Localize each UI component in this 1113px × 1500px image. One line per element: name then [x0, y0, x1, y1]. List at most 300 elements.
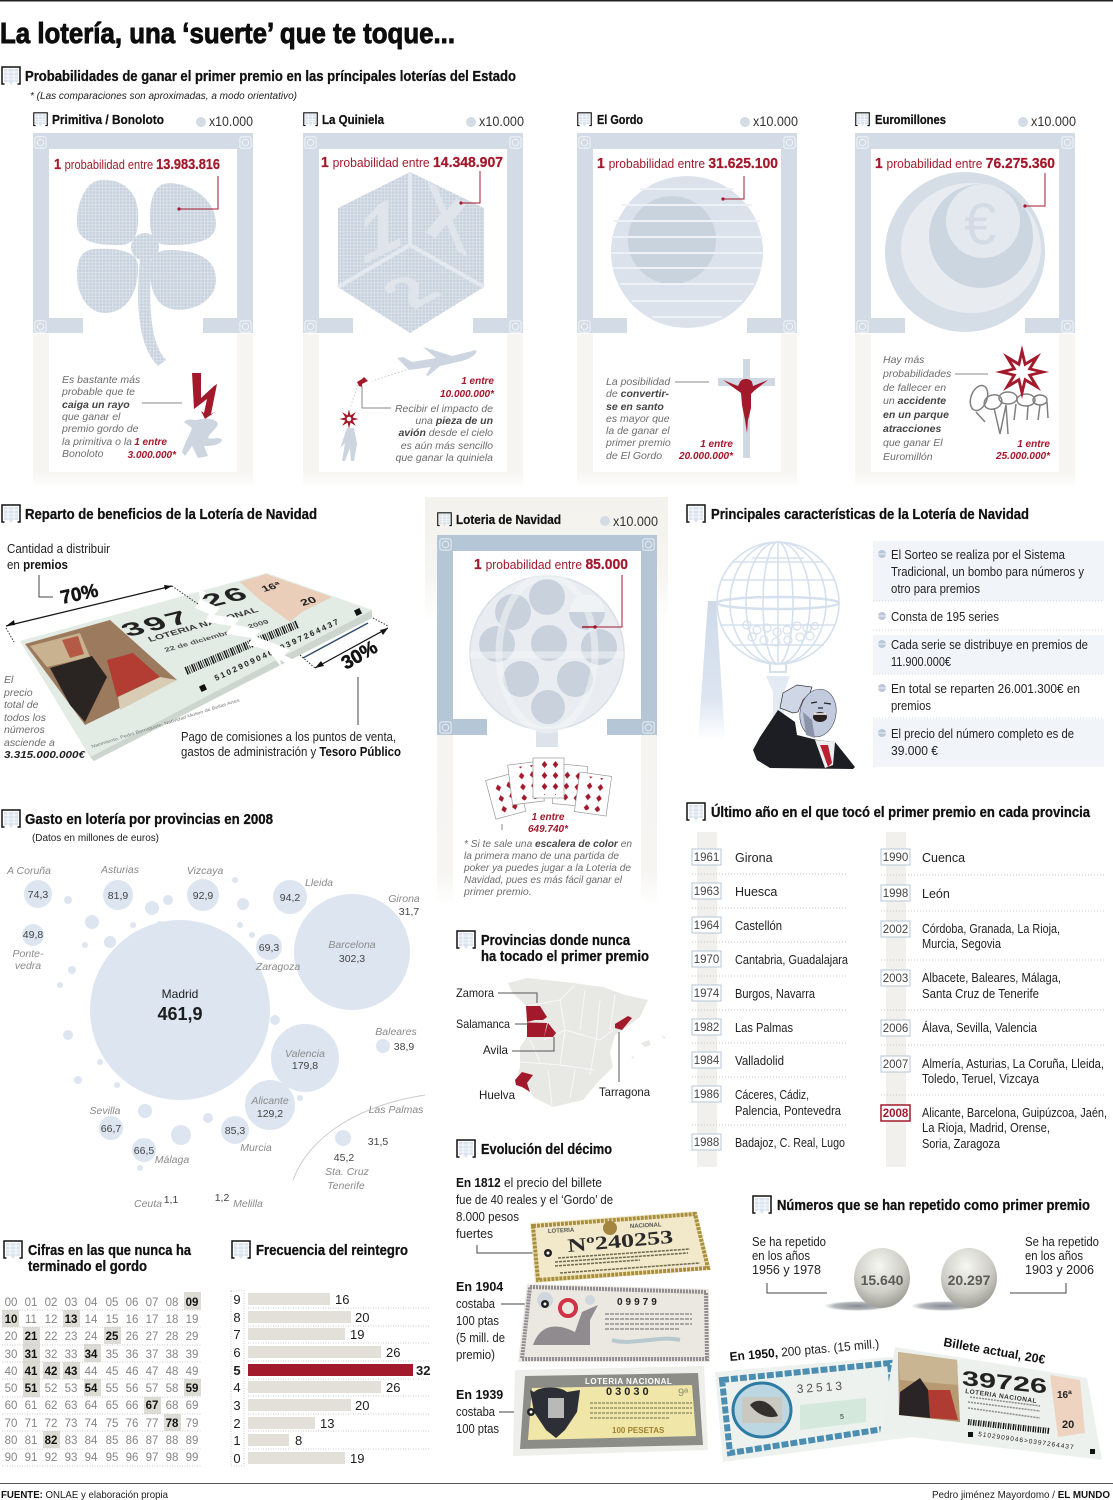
number grid: 51 [25, 1383, 38, 1395]
text: 1812 [456, 1176, 613, 1253]
text: commissions [181, 730, 401, 759]
panel: Euromillones: 25.000.000* [995, 451, 1051, 462]
icon: euro sphere [885, 172, 1045, 332]
list: characteristics: Consta de 195 series [891, 610, 999, 624]
left column of years: 1963 [694, 886, 719, 898]
probability label: 1 probabilidad entre 13.983.816 [54, 156, 220, 173]
number grid: 23 [65, 1331, 77, 1343]
number grid: 94 [85, 1452, 98, 1464]
number grid: 92 [45, 1452, 57, 1464]
number grid: 30 [5, 1349, 17, 1361]
bubble chart: 179,8 [292, 1060, 318, 1072]
icon: four-leaf clover [77, 180, 216, 366]
section: main characteristics [687, 505, 1104, 769]
number grid: 54 [85, 1383, 98, 1395]
bubble chart: Vizcaya [187, 865, 223, 877]
ticket: current: 16ª [1057, 1390, 1072, 1401]
bubble chart: Valencia [285, 1048, 325, 1060]
number grid: 06 [126, 1297, 138, 1309]
text: airplane comparison: Recibir el impacto de [395, 403, 493, 415]
text: 20.297 years: en los años [1025, 1249, 1083, 1263]
bubble chart: 66,5 [134, 1145, 154, 1157]
bubble chart: Asturias [100, 864, 140, 876]
number grid: 42 [45, 1366, 57, 1378]
text: lightning comparison: que ganar el [62, 411, 121, 423]
ball: 15.640 [824, 1248, 910, 1311]
number grid: 93 [65, 1452, 77, 1464]
icon: 1X2 cube: 2 [366, 267, 456, 317]
number grid: 98 [166, 1452, 178, 1464]
panel: Primitiva / Bonoloto: x10.000 [209, 114, 253, 129]
text: poker footnote: * Si te sale una escalera de color en [464, 838, 632, 850]
right column of years: 1990 [883, 852, 908, 864]
number grid: 66 [126, 1400, 138, 1412]
ticket: 1950: 32513 [796, 1379, 845, 1396]
number grid: 12 [45, 1314, 57, 1326]
number grid: 79 [186, 1418, 198, 1430]
heading: Provincias donde nunca [481, 932, 631, 949]
number grid: 11 [25, 1314, 37, 1326]
bubble chart: 45,2 [334, 1152, 354, 1164]
section: never-won endings: terminado el gordo [28, 1258, 147, 1275]
label: prizes [7, 542, 110, 597]
ticket: 1939 [513, 1366, 708, 1456]
bar chart: 4 [233, 1380, 241, 1395]
panel: La Quiniela: 10.000.000* [440, 389, 495, 400]
number grid: 62 [45, 1400, 57, 1412]
icon: person [340, 428, 357, 461]
bubble chart: 31,7 [399, 906, 419, 918]
bar chart [231, 1291, 430, 1466]
number grid: 70 [5, 1418, 17, 1430]
left column of years: Palencia, Pontevedra [735, 1104, 841, 1118]
number grid: 26 [126, 1331, 138, 1343]
text: saint comparison: La posibilidad [606, 376, 671, 388]
number grid: 74 [85, 1418, 98, 1430]
text: poker footnote [463, 838, 632, 898]
text: saint comparison: de convertir- [606, 388, 670, 400]
panel: El Gordo: x10.000 [753, 114, 798, 129]
text: 1904: 100 ptas [456, 1314, 499, 1328]
bubble chart: Melilla [233, 1198, 263, 1210]
icon: section marker [753, 1196, 771, 1214]
text: 1904: (5 mill. de [456, 1331, 505, 1345]
label: prizes: Cantidad a distribuir [7, 542, 110, 556]
map of Spain [456, 978, 666, 1107]
left column of years: 1984 [694, 1055, 720, 1067]
icon: illustrated man [753, 685, 855, 769]
text: 1812: fuertes [456, 1227, 493, 1241]
number grid: 27 [146, 1331, 158, 1343]
number grid: 47 [146, 1366, 158, 1378]
icon: gordo sphere [611, 176, 763, 328]
heading: Frecuencia del reintegro [256, 1242, 408, 1259]
ticket illustration: 20 [298, 594, 319, 608]
note: unit: (Datos en millones de euros) [32, 833, 159, 844]
ticket: 1904 [518, 1284, 710, 1362]
bubble chart: Murcia [240, 1142, 272, 1154]
right column of years: 2008 [883, 1108, 909, 1120]
right column of years: León [922, 887, 950, 901]
text: 20.297 years: Se ha repetido [1025, 1235, 1099, 1249]
ticket illustration: 16ª [260, 580, 284, 594]
number grid: 38 [166, 1349, 178, 1361]
bubble chart: Sta. Cruz [325, 1166, 370, 1178]
number grid: 77 [146, 1418, 158, 1430]
number grid: 04 [85, 1297, 98, 1309]
bar chart: 16 [335, 1292, 349, 1307]
section: last winning year [687, 803, 1107, 1167]
panel: El Gordo: El Gordo [597, 112, 643, 127]
number grid: 88 [166, 1435, 178, 1447]
panel: Lotería de Navidad [425, 497, 668, 917]
bubble chart: Barcelona [328, 939, 376, 951]
bubble chart: 1,1 [164, 1194, 178, 1206]
bar chart: 19 [350, 1327, 364, 1342]
number grid: 52 [45, 1383, 57, 1395]
arrow: 30% [300, 618, 388, 725]
heading: Reparto de beneficios de la Lotería de Navidad [25, 506, 317, 523]
ticket: current: 20 [1062, 1419, 1074, 1431]
panel: El Gordo: 20.000.000* [678, 451, 734, 462]
probability label: 1 probabilidad entre 76.275.360 [875, 155, 1055, 172]
bar chart: 2 [233, 1416, 241, 1431]
number grid: 78 [166, 1418, 179, 1430]
left column of years: Burgos, Navarra [735, 987, 815, 1001]
label: prizes: en premios [7, 558, 68, 572]
text: total price: números [4, 724, 46, 736]
panel: Euromillones [855, 112, 1076, 488]
text: 1812: En 1812 el precio del billete [456, 1176, 602, 1190]
panel: La Quiniela: x10.000 [479, 114, 524, 129]
number grid: 76 [126, 1418, 138, 1430]
ticket: current: 39726 [962, 1366, 1047, 1398]
number grid: 67 [146, 1400, 158, 1412]
section: reimbursement frequency [231, 1241, 430, 1466]
number grid: 39 [186, 1349, 198, 1361]
bubble chart: 85,3 [225, 1125, 245, 1137]
bubble chart: 31,5 [368, 1136, 388, 1148]
section: profit share of ticket [2, 505, 401, 761]
bar chart: 13 [320, 1416, 334, 1431]
icon: euro sphere: € [964, 192, 996, 257]
text: 1904 [456, 1280, 545, 1362]
bar chart: 19 [350, 1451, 364, 1466]
probability label: 1 probabilidad entre 14.348.907 [321, 154, 503, 171]
number grid: 45 [106, 1366, 118, 1378]
text: 20.297 years [1010, 1235, 1099, 1293]
number grid: 17 [146, 1314, 158, 1326]
text: accident comparison: un accidente [883, 395, 946, 407]
ticket illustration: LOTERIA NACIONAL [146, 606, 260, 644]
left column of years: 1964 [694, 920, 720, 932]
text: lightning comparison [61, 374, 141, 460]
number grid: 43 [65, 1366, 77, 1378]
bubble chart: 69,3 [259, 942, 279, 954]
right column of years [881, 849, 1107, 1151]
heading: Gasto en lotería por provincias en 2008 [25, 811, 273, 828]
number grid: 71 [25, 1418, 37, 1430]
ticket illustration: 5102909046>0397264437 [213, 616, 342, 683]
heading: Cifras en las que nunca ha [28, 1242, 192, 1259]
ticket: current: 5102909046>0397264437 [978, 1431, 1075, 1451]
title: La lotería, una ‘suerte’ que te toque... [0, 18, 455, 50]
number grid: 01 [25, 1297, 37, 1309]
number grid: 95 [106, 1452, 118, 1464]
text: accident comparison [882, 354, 952, 463]
number grid: 31 [25, 1349, 38, 1361]
bubble chart: Las Palmas [369, 1104, 424, 1116]
number grid: 56 [126, 1383, 138, 1395]
right column of years: 2007 [883, 1059, 908, 1071]
bubble chart: Tenerife [327, 1180, 365, 1192]
map of Spain: Zamora [456, 986, 494, 1000]
bubble chart: Lleida [305, 877, 333, 889]
number grid: 85 [106, 1435, 118, 1447]
icon: lottery globe [717, 542, 839, 728]
left column of years: Cáceres, Cádiz, [735, 1088, 809, 1102]
text: lightning comparison: Es bastante más [62, 374, 141, 386]
right column of years: 2006 [883, 1023, 908, 1035]
section: provinces never won: ha tocado el primer premio [481, 948, 649, 965]
label: 1950: En 1950, 200 ptas. (15 mill.) [729, 1337, 880, 1364]
number grid: 87 [146, 1435, 158, 1447]
bubble chart: Baleares [375, 1026, 417, 1038]
number grid: 65 [106, 1400, 118, 1412]
panel: La Quiniela [303, 112, 524, 488]
number grid: 00 [5, 1297, 17, 1309]
icon: 1X2 cube [338, 164, 484, 333]
arrow: 70% [6, 580, 198, 642]
bar chart: 3 [233, 1398, 241, 1413]
number grid: 53 [65, 1383, 77, 1395]
icon: crucifix [718, 359, 775, 458]
ticket illustration: Nacimiento. Pedro Berruguete, Natividad Museo de Bellas Artes [91, 698, 241, 750]
right column of years: Santa Cruz de Tenerife [922, 987, 1039, 1001]
number grid: 55 [106, 1383, 118, 1395]
bar chart: 20 [355, 1310, 369, 1325]
bar chart: 5 [233, 1363, 241, 1378]
number grid: 68 [166, 1400, 178, 1412]
bar chart: 1 [233, 1433, 241, 1448]
left column of years: Valladolid [735, 1054, 784, 1068]
text: 15.640 years [752, 1235, 827, 1293]
number grid [2, 1292, 201, 1466]
number grid: 08 [166, 1297, 178, 1309]
text: 15.640 years: en los años [752, 1249, 810, 1263]
number grid: 22 [45, 1331, 57, 1343]
ticket illustration: 22 de diciembre de 2009 [163, 618, 271, 653]
right column of years: Toledo, Teruel, Vizcaya [922, 1072, 1039, 1086]
panel: Primitiva / Bonoloto [33, 112, 253, 488]
number grid: 91 [25, 1452, 37, 1464]
ticket: 1812 [530, 1211, 711, 1283]
ball: 15.640: 15.640 [861, 1272, 904, 1288]
bar chart: 20 [355, 1398, 369, 1413]
left column of years: Las Palmas [735, 1021, 793, 1035]
text: total price [3, 674, 86, 761]
text: commissions: Pago de comisiones a los puntos de venta, [181, 730, 396, 744]
left column of years: Castellón [735, 919, 782, 933]
number grid: 83 [65, 1435, 77, 1447]
icon: section marker [232, 1241, 250, 1259]
number grid: 28 [166, 1331, 178, 1343]
callout line [179, 176, 218, 209]
text: airplane comparison [395, 403, 493, 464]
bubble chart: 461,9 [157, 1004, 203, 1024]
bubble chart: Ceuta [134, 1198, 162, 1210]
number grid: 32 [45, 1349, 57, 1361]
number grid: 99 [186, 1452, 198, 1464]
number grid: 59 [186, 1383, 198, 1395]
text: saint comparison: es mayor que [606, 413, 670, 425]
text: 1812: 8.000 pesos [456, 1210, 519, 1224]
number grid: 16 [126, 1314, 138, 1326]
risk figure: 1 entre [134, 437, 167, 448]
footer [0, 1483, 1113, 1500]
number grid: 03 [65, 1297, 77, 1309]
number grid: 86 [126, 1435, 138, 1447]
number grid: 82 [45, 1435, 57, 1447]
text: poker footnote: Navidad, pues es más fácil ganar el [464, 874, 623, 886]
text: 1904: premio) [456, 1348, 495, 1362]
section: spending by province [2, 810, 425, 1210]
icon: explosion star [995, 345, 1049, 399]
text: total price: total de [4, 699, 39, 711]
ticket: 1939: 100 PESETAS [612, 1426, 665, 1435]
bubble chart: 302,3 [339, 953, 365, 965]
text: 1939 [456, 1388, 530, 1436]
bubble chart: Madrid [162, 987, 198, 1001]
bubble chart: vedra [15, 960, 41, 972]
text: 1812: fue de 40 reales y el ‘Gordo’ de [456, 1193, 613, 1207]
number grid: 46 [126, 1366, 138, 1378]
left column of years: Huesca [735, 885, 777, 899]
number grid: 61 [25, 1400, 37, 1412]
text: 15.640 years: 1956 y 1978 [752, 1263, 821, 1277]
text: airplane comparison: avión desde el cielo [398, 427, 493, 439]
panel: Primitiva / Bonoloto: 3.000.000* [128, 450, 177, 461]
number grid: 60 [5, 1400, 17, 1412]
panel: Lotería de Navidad: 649.740* [528, 824, 569, 835]
right column of years: 2002 [883, 924, 908, 936]
panel: Lotería de Navidad: Loteria de Navidad [456, 512, 561, 527]
ticket: 1939: 03030 [606, 1386, 652, 1398]
bar chart: 9 [233, 1292, 241, 1307]
text: 1904: costaba [456, 1297, 495, 1311]
list: characteristics: otro para premios [891, 582, 980, 596]
number grid: 05 [106, 1297, 118, 1309]
text: saint comparison: de El Gordo [606, 450, 662, 462]
probability label: 1 probabilidad entre 85.000 [474, 556, 628, 573]
number grid: 73 [65, 1418, 77, 1430]
text: poker footnote: la primera mano de una partida de [464, 850, 619, 862]
number grid: 25 [106, 1331, 119, 1343]
text: total price: asciende a [4, 737, 55, 749]
bubble chart: Sevilla [90, 1105, 121, 1117]
callout line [1025, 173, 1045, 206]
text: saint comparison [605, 376, 671, 462]
bubble chart: 66,7 [101, 1123, 121, 1135]
list: characteristics [873, 541, 1104, 767]
number grid: 64 [85, 1400, 98, 1412]
right column of years: Cuenca [922, 851, 965, 865]
text: saint comparison: primer premio [605, 437, 671, 449]
number grid: 34 [85, 1349, 98, 1361]
list: characteristics: premios [891, 699, 931, 713]
icon: airplane [397, 347, 476, 376]
icon: lightning bolt [192, 373, 217, 419]
bar chart: 26 [386, 1345, 400, 1360]
text: saint comparison: se en santo [606, 401, 664, 413]
risk figure: 1 entre [1017, 439, 1050, 450]
text: airplane comparison: es aún más sencillo [401, 440, 493, 452]
icon: section marker [2, 67, 20, 85]
left column of years: 1982 [694, 1022, 719, 1034]
heading: probabilities: Probabilidades de ganar el primer premio en las príncipales loterías del Estado [25, 68, 516, 85]
left column of years: Girona [735, 851, 773, 865]
tear [195, 588, 298, 668]
section: probabilities [2, 67, 1076, 488]
icon: globe stand [698, 601, 725, 740]
bubble chart: Zaragoza [255, 961, 300, 973]
number grid: 09 [186, 1297, 198, 1309]
bar chart: 32 [416, 1363, 430, 1378]
icon: amusement ride [967, 383, 1048, 434]
panel: Lotería de Navidad: x10.000 [613, 514, 658, 529]
ticket: 1812: LOTERIA [548, 1228, 575, 1235]
bar chart: 8 [295, 1433, 302, 1448]
text: lightning comparison: caiga un rayo [62, 399, 130, 411]
number grid: 80 [5, 1435, 17, 1447]
text: accident comparison: atracciones [883, 423, 942, 435]
text: commissions: gastos de administración y Tesoro Público [181, 745, 401, 759]
number grid: 69 [186, 1400, 198, 1412]
text: accident comparison: que ganar El [883, 437, 943, 449]
probability label: 1 probabilidad entre 31.625.100 [597, 155, 778, 172]
ball: 20.297 [911, 1248, 997, 1311]
text: 1939: 100 ptas [456, 1422, 499, 1436]
left column of years [692, 849, 848, 1150]
text: poker footnote: primer premio. [463, 886, 532, 898]
map of Spain: Avila [483, 1043, 508, 1057]
callout line [723, 176, 744, 199]
number grid: 10 [5, 1314, 17, 1326]
text: total price: 3.315.000.000€ [4, 749, 86, 761]
arrow: 70%: 70% [59, 580, 100, 609]
callout line [461, 171, 480, 203]
text: 1939: costaba [456, 1405, 495, 1419]
left column of years: 1961 [694, 852, 719, 864]
number grid: 57 [146, 1383, 158, 1395]
risk figure: 1 entre [532, 812, 565, 823]
bubble chart: 38,9 [394, 1041, 414, 1053]
number grid: 89 [186, 1435, 198, 1447]
number grid: 02 [45, 1297, 57, 1309]
callout line [595, 575, 622, 627]
icon: section marker [687, 505, 705, 523]
map of Spain: Salamanca [456, 1017, 510, 1031]
number grid: 14 [85, 1314, 98, 1326]
text: total price: todos los [4, 712, 47, 724]
icon: impact star [339, 409, 359, 429]
number grid: 37 [146, 1349, 158, 1361]
number grid: 63 [65, 1400, 77, 1412]
text: lightning comparison: Bonoloto [62, 448, 104, 460]
list: characteristics: 39.000 € [891, 744, 938, 758]
heading: Evolución del décimo [481, 1141, 612, 1158]
section: evolution of the tenth [456, 1140, 1102, 1462]
